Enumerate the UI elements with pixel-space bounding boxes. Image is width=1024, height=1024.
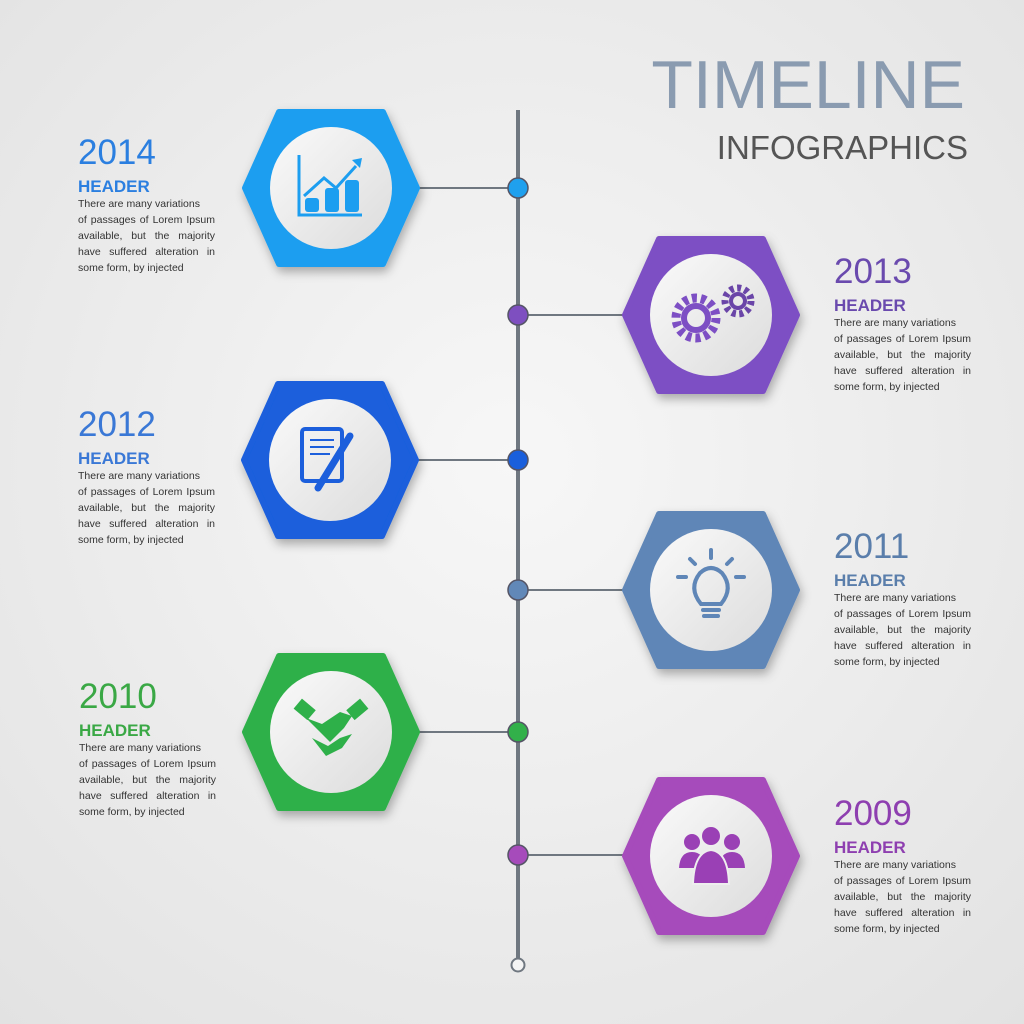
text: 2013: have suffered alteration in (834, 365, 971, 377)
text: 2014: of passages of Lorem Ipsum (78, 214, 215, 226)
text: 2012 (78, 405, 215, 546)
dots (508, 178, 528, 865)
text: 2011: available, but the majority (834, 624, 971, 636)
title: TIMELINE (651, 47, 965, 123)
text: 2013: available, but the majority (834, 349, 971, 361)
text: 2009: There are many variations (834, 859, 956, 871)
text: 2010: available, but the majority (79, 774, 216, 786)
text: 2013: of passages of Lorem Ipsum (834, 333, 971, 345)
timeline axis (512, 110, 524, 972)
text: 2013: 2013 (834, 252, 912, 291)
text: 2012: some form, by injected (78, 534, 184, 546)
text: 2009: 2009 (834, 794, 912, 833)
text: 2011: have suffered alteration in (834, 640, 971, 652)
text: 2011: HEADER (834, 571, 906, 590)
text: 2010: have suffered alteration in (79, 790, 216, 802)
text: 2014: HEADER (78, 177, 150, 196)
hex 2014 (245, 112, 417, 264)
text: 2010 (79, 677, 216, 818)
text: 2014 (78, 133, 215, 274)
text: 2011: of passages of Lorem Ipsum (834, 608, 971, 620)
title (651, 47, 968, 166)
title: INFOGRAPHICS (717, 129, 968, 166)
text: 2009: HEADER (834, 838, 906, 857)
text: 2013 (834, 252, 971, 393)
text: 2012: available, but the majority (78, 502, 215, 514)
connectors (415, 188, 630, 855)
text: 2010: 2010 (79, 677, 157, 716)
text: 2012: HEADER (78, 449, 150, 468)
hex 2013 (625, 239, 797, 391)
text: 2012: of passages of Lorem Ipsum (78, 486, 215, 498)
text: 2010: some form, by injected (79, 806, 185, 818)
text: 2011: 2011 (834, 527, 909, 566)
text: 2012: have suffered alteration in (78, 518, 215, 530)
hex 2009 (625, 780, 797, 932)
text: 2009: have suffered alteration in (834, 907, 971, 919)
text: 2014: available, but the majority (78, 230, 215, 242)
text: 2014: have suffered alteration in (78, 246, 215, 258)
text: 2014: There are many variations (78, 198, 200, 210)
text: 2010: of passages of Lorem Ipsum (79, 758, 216, 770)
text: 2009 (834, 794, 971, 935)
hex 2010 (245, 656, 417, 808)
text: 2012: There are many variations (78, 470, 200, 482)
hex 2011 (625, 514, 797, 666)
text: 2013: There are many variations (834, 317, 956, 329)
text: 2013: HEADER (834, 296, 906, 315)
text: 2009: some form, by injected (834, 923, 940, 935)
text: 2009: of passages of Lorem Ipsum (834, 875, 971, 887)
text: 2011 (834, 527, 971, 668)
text: 2014: some form, by injected (78, 262, 184, 274)
text: 2011: There are many variations (834, 592, 956, 604)
text: 2013: some form, by injected (834, 381, 940, 393)
text: 2009: available, but the majority (834, 891, 971, 903)
text: 2010: There are many variations (79, 742, 201, 754)
text: 2012: 2012 (78, 405, 156, 444)
text: 2014: 2014 (78, 133, 156, 172)
text: 2011: some form, by injected (834, 656, 940, 668)
text: 2010: HEADER (79, 721, 151, 740)
hex 2012 (244, 384, 416, 536)
